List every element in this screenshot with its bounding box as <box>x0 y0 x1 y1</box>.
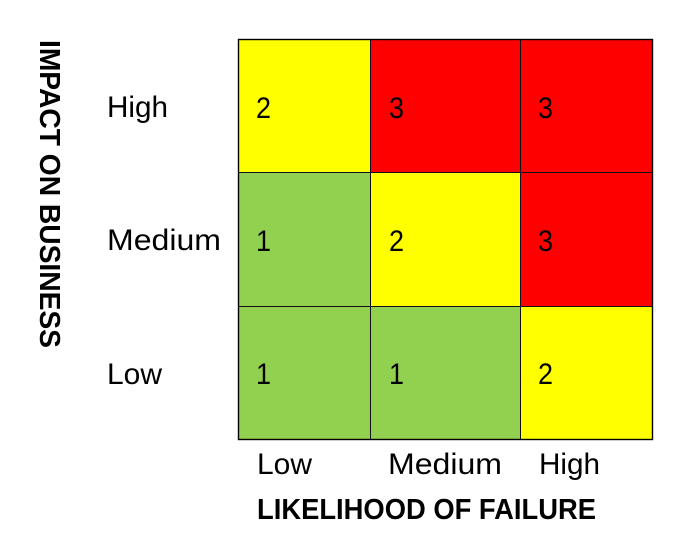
label: low impact: Low <box>107 358 162 391</box>
cell: low impact, high likelihood <box>520 306 652 440</box>
cell: medium impact, low likelihood <box>238 172 370 306</box>
label: medium impact: Medium <box>107 224 221 257</box>
risk matrix grid <box>238 40 652 440</box>
grid outer border <box>238 40 652 440</box>
label: medium likelihood: Medium <box>388 448 502 481</box>
score: high/medium: 3 <box>389 92 404 125</box>
score: low/high: 2 <box>538 358 553 391</box>
label: low likelihood: Low <box>257 448 312 481</box>
x axis title: LIKELIHOOD OF FAILURE <box>257 494 596 526</box>
score: medium/medium: 2 <box>389 225 404 258</box>
y axis labels <box>107 91 221 391</box>
cell scores <box>256 92 553 391</box>
score: low/low: 1 <box>256 358 271 391</box>
score: high/low: 2 <box>256 92 271 125</box>
y axis title: IMPACT ON BUSINESS <box>33 40 65 348</box>
cell: high impact, medium likelihood <box>370 40 520 172</box>
cell: low impact, medium likelihood <box>370 306 520 440</box>
score: medium/high: 3 <box>538 225 553 258</box>
score: medium/low: 1 <box>256 225 271 258</box>
score: high/high: 3 <box>538 92 553 125</box>
cell: high impact, low likelihood <box>238 40 370 172</box>
cell: high impact, high likelihood <box>520 40 652 172</box>
cell: medium impact, high likelihood <box>520 172 652 306</box>
cell: low impact, low likelihood <box>238 306 370 440</box>
score: low/medium: 1 <box>389 358 404 391</box>
cell: medium impact, medium likelihood <box>370 172 520 306</box>
x axis labels <box>257 448 600 481</box>
label: high impact: High <box>107 91 168 124</box>
label: high likelihood: High <box>539 448 600 481</box>
